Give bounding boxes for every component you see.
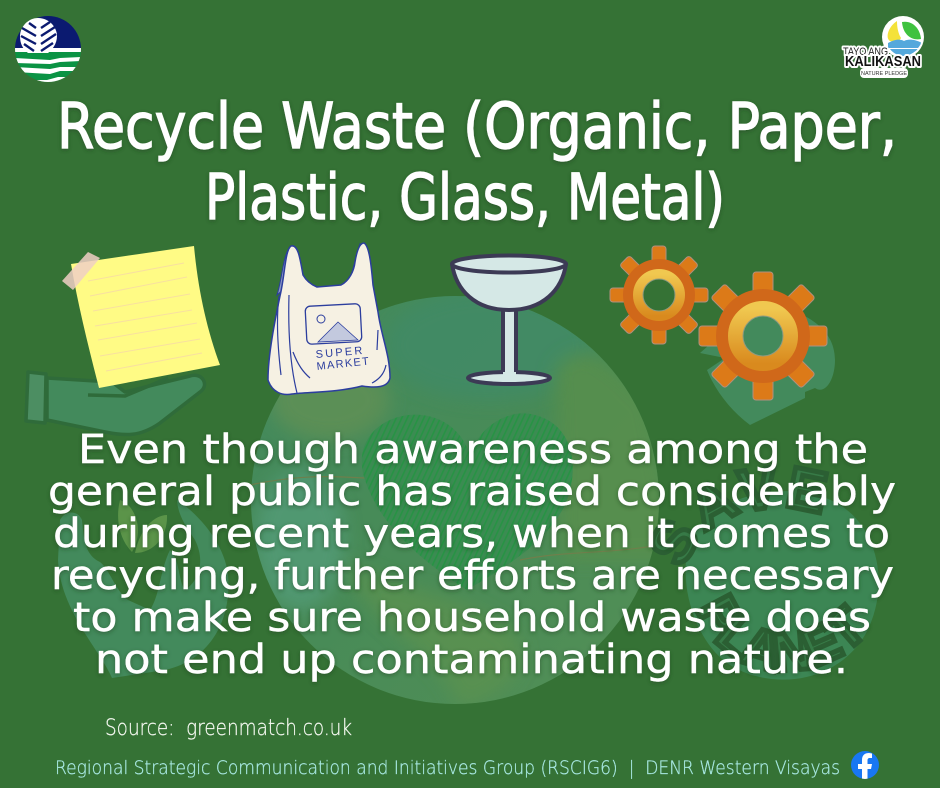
- heart scribble: [362, 413, 573, 590]
- icon: facebook: [851, 751, 879, 780]
- icon: glass goblet: [452, 256, 566, 384]
- bag text: [315, 345, 371, 373]
- logo: DENR seal: [15, 16, 81, 85]
- hand holding note icon: [26, 372, 205, 435]
- icon: large gear: [699, 272, 827, 400]
- body text: not end up contaminating nature.: [95, 637, 848, 683]
- body text: general public has raised considerably: [48, 469, 896, 515]
- tape: [62, 252, 100, 290]
- body text: [48, 427, 896, 683]
- logo wordmark: TAYO ANG: [843, 46, 888, 58]
- source line: Source: greenmatch.co.uk: [105, 716, 352, 741]
- icon: plastic bag: [268, 243, 390, 394]
- badge lettering: [651, 464, 864, 675]
- body text: to make sure household waste does: [73, 595, 871, 641]
- bag print: [305, 304, 362, 344]
- logo: Tayo Ang Kalikasan: [843, 16, 924, 78]
- badge lettering: SAVE: [651, 464, 830, 566]
- title: Plastic, Glass, Metal): [205, 161, 725, 234]
- icon: yellow note (paper): [62, 246, 220, 388]
- seal tree: [20, 18, 57, 53]
- footer credit: Regional Strategic Communication and Initiatives Group (RSCIG6) | DENR Western Visayas: [55, 757, 840, 779]
- leaf watermark behind gears: [700, 300, 835, 425]
- hands watermark: [58, 500, 228, 678]
- body text: during recent years, when it comes to: [53, 511, 890, 557]
- icon: small gear: [610, 246, 708, 344]
- body text: Even though awareness among the: [78, 427, 868, 473]
- logo wordmark: KALIKASAN: [845, 53, 921, 70]
- bag text: SUPER: [315, 345, 365, 361]
- logo wordmark: NATURE PLEDGE: [861, 71, 907, 77]
- bag text: MARKET: [316, 355, 371, 373]
- globe watermark: [250, 290, 680, 710]
- save planet badge: [651, 464, 878, 680]
- title: [57, 90, 897, 234]
- badge lettering: PLANET: [694, 591, 864, 675]
- body text: recycling, further efforts are necessary: [51, 553, 894, 599]
- sprout in hands: [118, 500, 167, 553]
- logo wordmark: [843, 46, 921, 78]
